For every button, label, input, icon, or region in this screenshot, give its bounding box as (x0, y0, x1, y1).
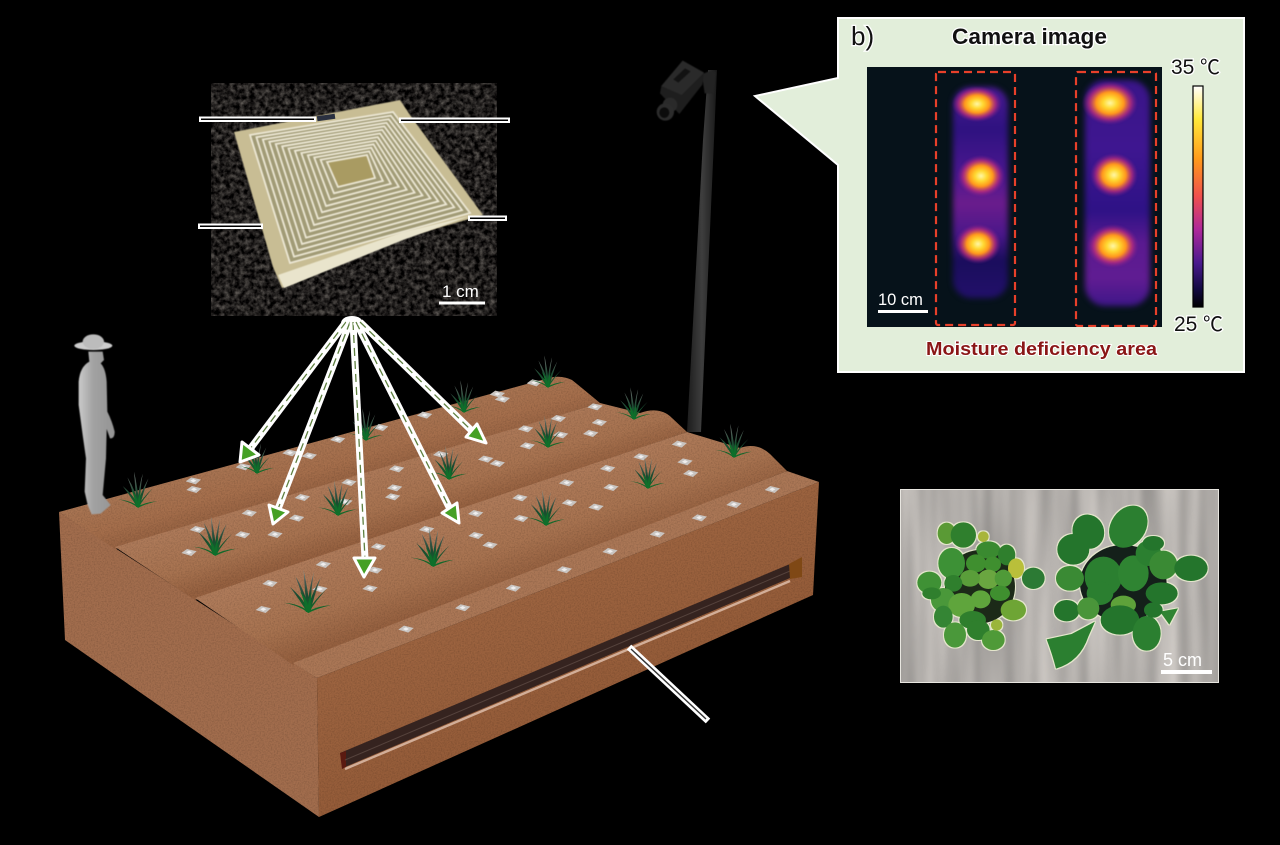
max temperature label: 35 (1171, 56, 1194, 79)
pipe leader line (629, 647, 708, 721)
spiral coil (250, 112, 470, 263)
caption: Moisture deficiency area (926, 339, 1158, 359)
left side face (59, 512, 319, 817)
connector tab (317, 114, 335, 121)
scale label: 10 cm (878, 291, 923, 309)
camera pole (687, 70, 717, 432)
max temperature label: ℃ (1200, 57, 1220, 79)
soil field block (59, 377, 819, 817)
table background (900, 489, 1219, 683)
arrow 2 (269, 322, 350, 524)
scale bar (878, 310, 928, 313)
arrow 1 (240, 322, 346, 462)
left plant heat column (952, 86, 1008, 298)
crop plants on ridges (118, 356, 752, 613)
thermal image (867, 67, 1162, 327)
sensor nodes on soil (left part) (181, 412, 448, 633)
min temperature label: 25 (1174, 313, 1197, 336)
panel letter: b) (851, 21, 874, 51)
underground pipe slot (340, 557, 802, 769)
scale bar (439, 302, 485, 304)
right plant heat column (1082, 80, 1150, 306)
plants (917, 498, 1208, 669)
panel: sensor photo (211, 83, 497, 316)
heading: Camera image (952, 24, 1107, 49)
callout shape (755, 18, 1244, 372)
person figure with hat (74, 334, 115, 514)
front strip (293, 471, 819, 678)
sensor nodes on soil (right part) (455, 379, 780, 611)
right plant (1047, 498, 1208, 669)
colour bar (1193, 86, 1203, 307)
left plant (917, 522, 1045, 650)
soil background (211, 83, 497, 316)
arrow 5 (360, 322, 486, 443)
panel: thermal camera callout (755, 18, 1244, 372)
panel: plant photo (900, 489, 1219, 683)
front ridge (195, 432, 787, 665)
moisture deficiency boxes (936, 72, 1156, 326)
scale label: 1 cm (442, 282, 479, 301)
middle ridge (115, 403, 687, 600)
arrows from sensor photo to field (240, 316, 486, 577)
arrow 3 (353, 322, 375, 577)
flexible sensor sheet (234, 100, 483, 288)
soil grain (59, 377, 819, 817)
scale label: 5 cm (1163, 650, 1202, 670)
arrow 4 (356, 322, 459, 523)
icon: camera (657, 61, 716, 121)
back ridge (59, 377, 600, 549)
min temperature label: ℃ (1203, 314, 1223, 336)
photo border (900, 489, 1219, 683)
front side face (317, 482, 819, 817)
sensor callout labels (199, 118, 509, 228)
scale bar (1161, 670, 1212, 674)
